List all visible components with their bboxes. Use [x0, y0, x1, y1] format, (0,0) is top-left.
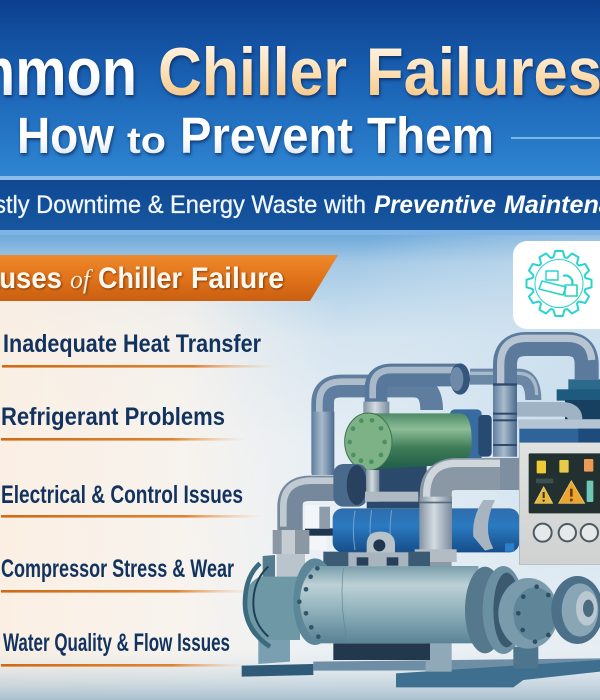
panel screen — [529, 453, 600, 513]
indicator lights — [536, 459, 593, 483]
subtitle band: Preventive — [374, 191, 496, 219]
base and supports — [242, 610, 600, 687]
green tank — [345, 413, 472, 470]
left lower pipe and flange — [283, 464, 418, 550]
right motor — [551, 576, 600, 644]
pipe: upper arch with flange — [363, 363, 470, 415]
title line 1: Chiller — [158, 34, 347, 110]
warning triangle small — [535, 487, 553, 503]
pipe: tall arch — [493, 338, 592, 457]
logo card — [513, 241, 600, 329]
section banner: causes of chiller failure — [0, 255, 338, 301]
section banner: causes of chiller failure: Failure — [191, 262, 284, 295]
subtitle band — [0, 176, 600, 235]
title line 2: Prevent — [180, 107, 353, 164]
pipe: rear horizontal — [470, 377, 533, 400]
blue collar behind green tank — [450, 409, 492, 463]
page background — [0, 235, 600, 700]
cause 3: Electrical & Control Issues — [1, 481, 243, 509]
gauges — [534, 524, 598, 542]
right end flanges and cap — [465, 566, 558, 654]
blue drum — [333, 500, 519, 552]
dark mid section behind pipes — [367, 463, 427, 508]
lifting lug — [348, 532, 408, 566]
title line 2: Them — [367, 107, 494, 164]
cause 2: Refrigerant Problems — [1, 403, 225, 431]
section banner: causes of chiller failure: of — [70, 265, 94, 294]
cause 5: Water Quality & Flow Issues — [3, 629, 230, 657]
control panel — [519, 443, 600, 564]
header panel — [0, 0, 600, 178]
middle front pipe — [415, 458, 519, 569]
cause 4: Compressor Stress & Wear — [1, 555, 234, 583]
back structure — [517, 379, 600, 447]
title line 2: How — [17, 107, 114, 164]
vertical connector — [263, 530, 430, 578]
chiller machine illustration — [242, 338, 600, 687]
title line 1 — [0, 34, 600, 110]
cause 1: Inadequate Heat Transfer — [3, 330, 261, 358]
section banner: causes of chiller failure: Chiller — [98, 262, 182, 295]
icon: gear with chiller — [526, 251, 592, 316]
status bar — [587, 481, 593, 502]
pipe: left arch — [312, 382, 432, 475]
title line 2 — [17, 107, 494, 164]
main vessel — [245, 558, 478, 647]
title line 2: to — [127, 120, 166, 161]
warning triangle large — [559, 481, 585, 503]
